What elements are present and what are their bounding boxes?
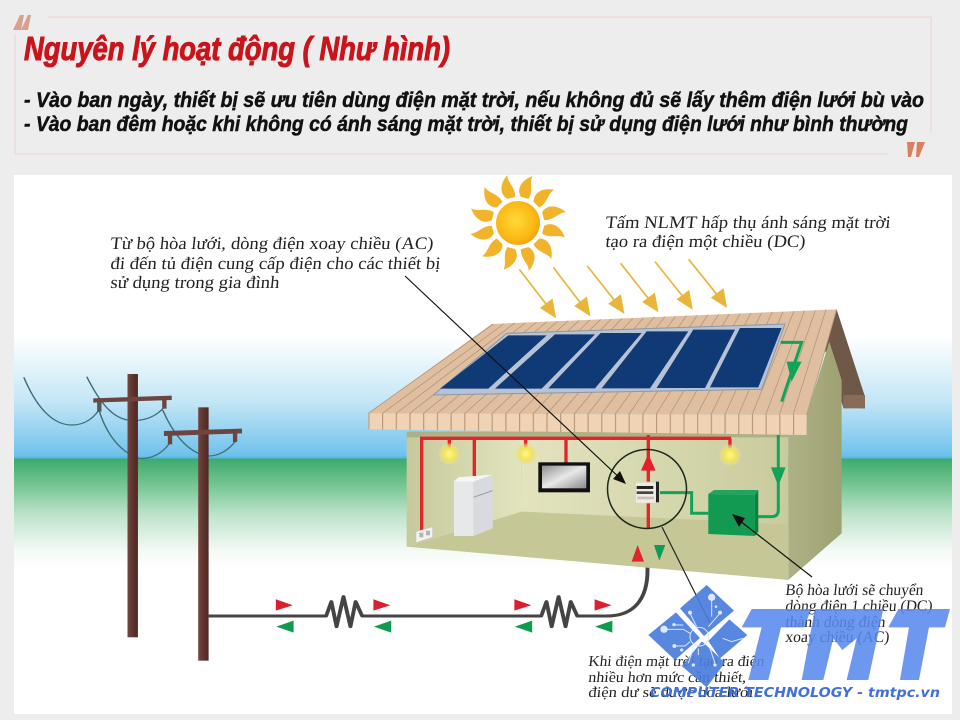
letter T left <box>742 609 811 680</box>
arrows: sun rays to the roof <box>519 259 726 317</box>
logo letters TMT <box>742 609 950 680</box>
text: inverter note: Bộ hòa lưới sẽ chuyển <box>785 582 924 599</box>
icon: closing quote mark <box>907 142 925 157</box>
text: AC from inverter note: đi đến tủ điện cung cấp điện cho các thiết bị <box>110 253 442 273</box>
text: inverter note <box>785 582 933 646</box>
text: solar panel note <box>605 212 892 251</box>
gable end fascia <box>843 395 865 408</box>
letter T right <box>888 609 950 680</box>
text: surplus power note: nhiều hơn mức cần thiết, <box>588 670 747 686</box>
panel: utility poles and grid line <box>24 374 648 661</box>
grid cable with resistors <box>209 532 648 627</box>
green flow arrows <box>276 621 612 633</box>
red AC wiring <box>422 435 731 530</box>
roof shadow <box>407 432 788 437</box>
wires <box>24 377 236 458</box>
icon: sun <box>469 174 567 272</box>
gable overhang <box>825 309 865 408</box>
grid flow triangles <box>632 545 644 562</box>
logo tagline: COMPUTER TECHNOLOGY - tmtpc.vn <box>650 686 940 701</box>
back wall <box>522 432 788 524</box>
red AC arrow <box>641 454 656 471</box>
panel: diagram background <box>14 175 952 714</box>
logo: TMT watermark <box>648 585 950 701</box>
text: solar panel note: Tấm NLMT hấp thụ ánh sáng mặt trời <box>605 212 892 232</box>
callout circle around meter <box>608 450 686 528</box>
text: surplus power note: điện dư sẽ được hòa lưới <box>588 685 754 701</box>
text: inverter note: xoay chiều (AC) <box>785 629 890 646</box>
TV <box>538 462 590 492</box>
electric meter <box>636 482 659 503</box>
inverter box <box>708 490 758 536</box>
green DC wiring <box>660 342 802 517</box>
fridge <box>454 475 493 536</box>
text: AC from inverter note: Từ bộ hòa lưới, dòng điện xoay chiều (AC) <box>110 233 435 253</box>
pointer: circle to surplus note <box>662 527 710 623</box>
logo diamond icon <box>648 585 747 687</box>
house <box>368 309 865 580</box>
light bulbs <box>439 443 741 466</box>
panel: heading box <box>13 15 931 157</box>
icon: opening quote mark <box>13 15 31 30</box>
text: surplus power note <box>588 654 766 701</box>
title: Nguyên lý hoạt động ( Như hình) <box>24 30 450 67</box>
floor <box>407 512 788 580</box>
text: AC from inverter note: sử dụng trong gia đình <box>110 272 281 292</box>
roof fascia <box>368 413 807 435</box>
letter M <box>802 609 883 680</box>
house right wall <box>788 342 842 580</box>
solar panels <box>433 324 785 395</box>
pole 2 <box>198 407 209 661</box>
left wall <box>407 432 522 547</box>
green DC arrows <box>771 362 802 486</box>
pole 1 <box>128 374 138 637</box>
text: inverter note: thành dòng điện <box>785 614 886 631</box>
quote frame lines <box>15 17 931 154</box>
pointer: inverter note <box>732 514 812 577</box>
text: surplus power note: Khi điện mặt trời tạo ra điện <box>588 654 766 670</box>
red flow arrows <box>276 599 612 611</box>
text: inverter note: dòng điện 1 chiều (DC) <box>785 598 933 615</box>
text: AC from inverter note <box>110 233 442 292</box>
roof slope <box>368 309 837 415</box>
text: solar panel note: tạo ra điện một chiều (DC) <box>605 231 807 251</box>
pointer: AC line to meter <box>405 276 626 484</box>
wall socket <box>416 527 433 543</box>
